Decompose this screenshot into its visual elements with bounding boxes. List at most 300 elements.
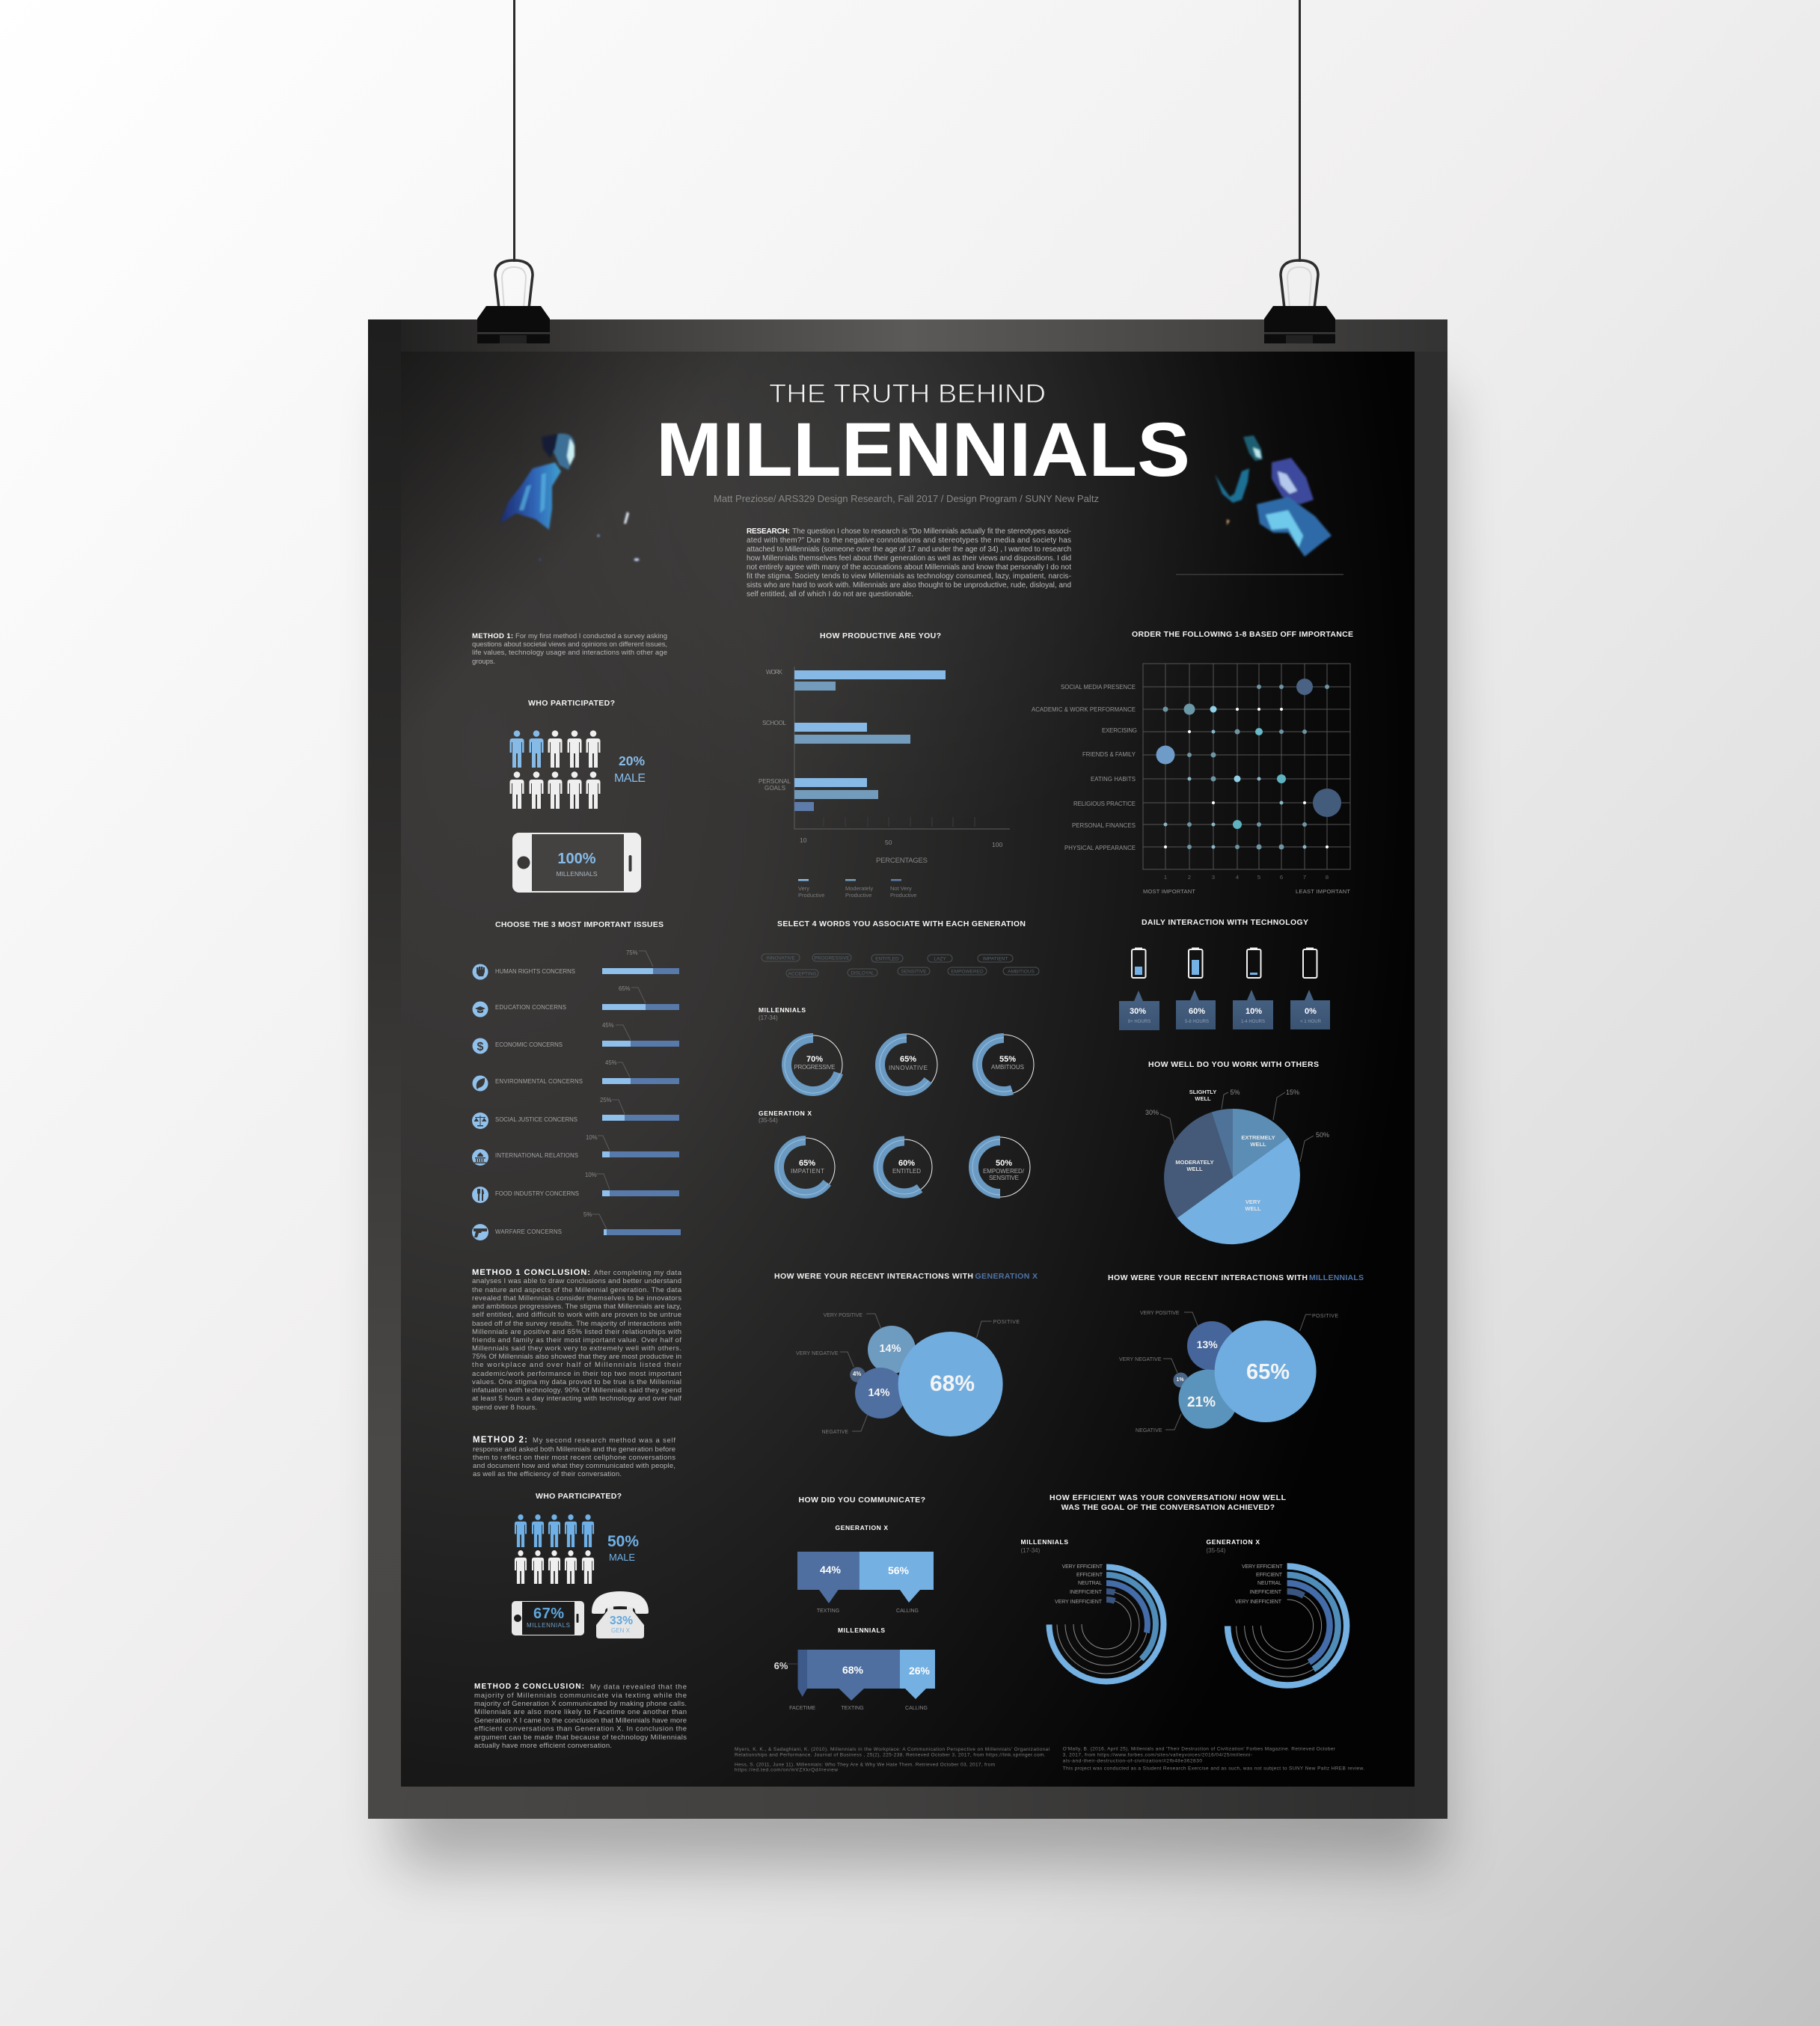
icon: dollar sign: $ bbox=[477, 1041, 484, 1053]
panel: issues bars bbox=[472, 949, 681, 1240]
issue leader lines bbox=[592, 951, 653, 1229]
radial labels: VERY EFFICIENT bbox=[1062, 1564, 1103, 1570]
bubble labels: VERY POSITIVE bbox=[1140, 1311, 1180, 1316]
references left: Hess, S. (2011, June 11). Millennials: Who They Are & Why We Hate Them. Retrieved October 03, 2017, from bbox=[735, 1763, 995, 1767]
slice labels: MODERATELY bbox=[1175, 1159, 1214, 1166]
stat: 20 percent male: MALE bbox=[614, 772, 646, 785]
slice labels: EXTREMELY bbox=[1241, 1134, 1275, 1141]
title bbox=[656, 379, 1190, 492]
bar chart: productivity bbox=[759, 667, 1010, 865]
legend: productivity bbox=[798, 879, 916, 899]
icon: pistol bbox=[474, 1228, 487, 1237]
matrix row labels: FRIENDS & FAMILY bbox=[1082, 751, 1136, 758]
battery stat: 30 percent bbox=[1119, 947, 1159, 1030]
legend: productivity: Productive bbox=[845, 892, 871, 899]
issue percentages: 10% bbox=[585, 1172, 597, 1178]
references left bbox=[735, 1747, 1050, 1773]
bubble: negative 21 percent bbox=[1179, 1369, 1237, 1429]
heading: interactions with generation x: HOW WERE YOUR RECENT INTERACTIONS WITH bbox=[774, 1272, 973, 1281]
donut: 65 percent innovative: INNOVATIVE bbox=[889, 1065, 928, 1071]
legend: productivity: Moderately bbox=[845, 885, 873, 892]
bar chart: productivity: 50 bbox=[885, 839, 892, 846]
pie leader lines bbox=[1160, 1092, 1314, 1162]
label: millennials efficiency bbox=[1020, 1538, 1068, 1554]
heading: three most important issues: CHOOSE THE 3 MOST IMPORTANT ISSUES bbox=[495, 920, 664, 929]
text block: research: self entitled, all of which I do not are questionable. bbox=[747, 590, 913, 599]
heading: select four words: SELECT 4 WORDS YOU ASSOCIATE WITH EACH GENERATION bbox=[777, 919, 1026, 928]
icon: scales bbox=[474, 1115, 486, 1127]
donut: 50 percent empowered sensitive: 50% bbox=[996, 1159, 1012, 1168]
donut: 65 percent impatient bbox=[767, 1128, 845, 1206]
text block: method 1 conclusion bbox=[472, 1268, 682, 1412]
heading: how productive: HOW PRODUCTIVE ARE YOU? bbox=[820, 631, 941, 640]
text block: method 2: METHOD 2: bbox=[473, 1436, 527, 1445]
bubble leader lines bbox=[1163, 1312, 1311, 1430]
slice: very well 50 percent bbox=[1177, 1137, 1300, 1244]
text block: method 1: groups. bbox=[472, 658, 495, 666]
matrix axis labels: 2 bbox=[1188, 874, 1191, 881]
inner panel top glow bbox=[401, 352, 1415, 875]
heading: conversation efficiency: WAS THE GOAL OF THE CONVERSATION ACHIEVED? bbox=[1061, 1503, 1275, 1512]
divider under right photo bbox=[1176, 574, 1343, 575]
radial labels bbox=[1235, 1564, 1283, 1605]
issue labels: ENVIRONMENTAL CONCERNS bbox=[495, 1078, 583, 1085]
slice labels: WELL bbox=[1250, 1141, 1266, 1148]
word pills: DISLOYAL bbox=[851, 971, 874, 976]
label: generation x efficiency bbox=[1206, 1538, 1260, 1554]
pie percentages: 15% bbox=[1286, 1089, 1299, 1096]
word pills: IMPATIENT bbox=[983, 956, 1008, 962]
text block: research: fit the stigma. Society tends to view Millennials as technology consumed, lazy, impatient, narcis- bbox=[747, 572, 1071, 581]
slice labels: WELL bbox=[1195, 1095, 1211, 1102]
issue percentages bbox=[583, 949, 638, 1218]
matrix row labels: ACADEMIC & WORK PERFORMANCE bbox=[1032, 706, 1136, 713]
text block: method 1 conclusion: and ambitious progressives. The stigma that Millennials are lazy, bbox=[472, 1303, 681, 1311]
matrix row labels: EXERCISING bbox=[1102, 727, 1137, 734]
pie percentages: 50% bbox=[1316, 1131, 1329, 1139]
slice labels: VERY bbox=[1245, 1199, 1260, 1205]
poster frame bbox=[368, 319, 1447, 1819]
title main word: MILLENNIALS bbox=[656, 407, 1190, 492]
text block: method 2 conclusion: majority of Millennials communicate via texting while the bbox=[474, 1692, 687, 1700]
heading: work with others: HOW WELL DO YOU WORK WITH OTHERS bbox=[1148, 1060, 1319, 1069]
battery stat: 0 percent bbox=[1290, 947, 1330, 1029]
poster inner panel bbox=[401, 352, 1415, 1787]
references right: 3, 2017, from https://www.forbes.com/sites/valleyvoices/2016/04/25/millenni- bbox=[1063, 1752, 1252, 1758]
slice: moderately well 30 percent bbox=[1164, 1112, 1233, 1218]
text block: research: not entirely agree with many of the accusations about Millennials and know that personally I do not bbox=[747, 563, 1071, 572]
bubble values: 68% bbox=[930, 1371, 975, 1396]
references right: O'Mally, B. (2016, April 25). Millenials and 'Their Destruction of Civilization' Forbes Magazine. Retrieved October bbox=[1063, 1746, 1336, 1752]
icon: phone 100 percent millennials: MILLENNIALS bbox=[557, 870, 598, 878]
icon: phone 100 percent millennials: 100% bbox=[557, 851, 596, 867]
text block: method 1 bbox=[472, 632, 667, 666]
issue percentages: 45% bbox=[602, 1022, 614, 1029]
bubble chart: interactions with millennials bbox=[1119, 1311, 1338, 1433]
donut: 60 percent entitled: 60% bbox=[898, 1159, 915, 1168]
text block: research: ated with them?" Due to the negative connotations and stereotypes the media and society has bbox=[747, 536, 1071, 545]
heading: conversation efficiency: HOW EFFICIENT WAS YOUR CONVERSATION/ HOW WELL bbox=[1050, 1493, 1287, 1502]
radial arcs bbox=[1228, 1567, 1346, 1685]
issue bar fills bbox=[602, 968, 653, 1235]
text block: method 2 bbox=[473, 1436, 675, 1478]
bubble labels: VERY NEGATIVE bbox=[796, 1351, 839, 1356]
bar chart: productivity: PERSONAL bbox=[759, 778, 791, 785]
text block: research bbox=[747, 527, 1071, 599]
issue icons bbox=[472, 964, 488, 1240]
matrix axis ends bbox=[1143, 888, 1350, 895]
text block: method 1 conclusion: self entitled, and difficult to work with are proven to be untrue bbox=[472, 1311, 681, 1319]
split bar: millennials communication: FACETIME bbox=[789, 1706, 815, 1711]
bubble: positive 68 percent bbox=[898, 1332, 1003, 1436]
bubble values: 1% bbox=[1177, 1377, 1184, 1383]
text block: method 1 conclusion: friends and family as their most important value. Over half of bbox=[472, 1336, 681, 1344]
donut: 60 percent entitled bbox=[867, 1130, 942, 1205]
radial labels: EFFICIENT bbox=[1256, 1573, 1283, 1578]
text block: research: RESEARCH: bbox=[747, 527, 790, 536]
heading: order importance: ORDER THE FOLLOWING 1-8 BASED OFF IMPORTANCE bbox=[1132, 630, 1353, 639]
donut: 55 percent ambitious: 55% bbox=[999, 1055, 1016, 1064]
references right: This project was conducted as a Student Research Exercise and as such, was not subject to SUNY New Paltz HREB review. bbox=[1063, 1766, 1364, 1772]
radial labels: VERY INEFFICIENT bbox=[1235, 1600, 1282, 1605]
donut: 70 percent progressive: PROGRESSIVE bbox=[794, 1064, 835, 1071]
icon: phone 100 percent millennials bbox=[512, 833, 641, 893]
icon: telephone 33 percent gen x bbox=[592, 1591, 649, 1638]
pictogram: 50 percent male bbox=[515, 1514, 594, 1584]
word pills: SENSITIVE bbox=[901, 970, 927, 974]
bottom frame band bbox=[368, 1787, 1447, 1819]
text block: method 2 conclusion: Generation X I came to the conclusion that Millennials have more bbox=[474, 1716, 687, 1725]
icon: telephone 33 percent gen x: 33% bbox=[610, 1615, 633, 1627]
donut: 65 percent impatient: IMPATIENT bbox=[791, 1168, 824, 1175]
bubble labels: POSITIVE bbox=[1312, 1314, 1338, 1319]
radial labels: VERY EFFICIENT bbox=[1242, 1564, 1283, 1570]
references right bbox=[1063, 1746, 1364, 1772]
issue labels: WARFARE CONCERNS bbox=[495, 1228, 562, 1235]
word pills: LAZY bbox=[934, 956, 946, 962]
icon: graduation cap bbox=[475, 1006, 485, 1013]
text block: method 1 conclusion: the workplace and over half of Millennials listed their bbox=[472, 1361, 681, 1369]
matrix grid bbox=[1143, 664, 1350, 869]
split bar: generation x communication: CALLING bbox=[896, 1609, 919, 1614]
donut: 65 percent innovative bbox=[869, 1027, 944, 1102]
text block: method 2 conclusion: Millennials are also more likely to Facetime one another than bbox=[474, 1708, 687, 1716]
split bar: millennials communication: 26% bbox=[909, 1665, 931, 1677]
battery stat: 0 percent: 0% bbox=[1305, 1007, 1317, 1016]
icon: phone 67 percent millennials: MILLENNIALS bbox=[527, 1622, 570, 1629]
issue labels: INTERNATIONAL RELATIONS bbox=[495, 1152, 578, 1159]
text block: method 1 conclusion: academic/work performance in their top two most important bbox=[472, 1370, 681, 1378]
heading: conversation efficiency bbox=[1050, 1493, 1287, 1512]
issue percentages: 45% bbox=[605, 1059, 617, 1066]
hanging wire left bbox=[513, 0, 515, 262]
text block: method 2: them to reflect on their most recent cellphone conversations bbox=[473, 1454, 675, 1462]
heading: interactions with millennials: MILLENNIALS bbox=[1309, 1273, 1364, 1282]
references left: Myers, K. K., & Sadaghiani, K. (2010). Millennials in the Workplace: A Communication Perspective on Millennials' Organizational bbox=[735, 1747, 1050, 1752]
bubble chart: interactions with generation x bbox=[796, 1313, 1020, 1436]
matrix axis labels bbox=[1164, 874, 1329, 881]
bubble labels: NEGATIVE bbox=[821, 1430, 848, 1435]
split bar: generation x communication: 44% bbox=[820, 1564, 842, 1576]
split bar: generation x communication: 56% bbox=[888, 1564, 910, 1576]
word pills: EMPOWERED bbox=[951, 970, 984, 974]
text block: method 1 conclusion: at least 5 hours a day interacting with technology and over half bbox=[472, 1395, 681, 1403]
matrix row labels: PERSONAL FINANCES bbox=[1072, 822, 1136, 829]
references right: als-and-their-destruction-of-civilization/#2fb48e362830 bbox=[1063, 1758, 1202, 1764]
legend: productivity: Productive bbox=[890, 892, 916, 899]
radial labels bbox=[1055, 1564, 1103, 1605]
donut: 70 percent progressive: 70% bbox=[806, 1055, 823, 1064]
label: millennials group bbox=[759, 1006, 806, 1021]
stat: 50 percent male: 50% bbox=[607, 1533, 639, 1550]
split bar: millennials communication: 6% bbox=[774, 1660, 788, 1671]
bubble labels bbox=[1119, 1311, 1338, 1433]
bubble: very negative 4 percent bbox=[850, 1367, 865, 1383]
matrix axis labels: 6 bbox=[1280, 874, 1283, 881]
text block: method 1 conclusion: spend over 8 hours. bbox=[472, 1404, 537, 1412]
text block: method 2: My second research method was a self bbox=[533, 1436, 675, 1445]
issue percentages: 65% bbox=[619, 985, 631, 992]
text block: method 2 conclusion: My data revealed that the bbox=[590, 1683, 687, 1691]
matrix axis labels: 8 bbox=[1326, 874, 1329, 881]
battery stat: 60 percent: 5-8 HOURS bbox=[1185, 1020, 1209, 1024]
icon: capitol bbox=[474, 1152, 486, 1163]
radial thin tracks bbox=[1057, 1575, 1156, 1674]
matrix axis ends: MOST IMPORTANT bbox=[1143, 888, 1195, 895]
slice: slightly well 5 percent bbox=[1212, 1109, 1233, 1178]
word pills: ENTITLED bbox=[875, 956, 899, 962]
icon: binder clip right bbox=[1264, 260, 1335, 343]
bubble values: 13% bbox=[1197, 1338, 1218, 1350]
photo: right student silhouettes bbox=[1215, 435, 1332, 557]
radial labels: INEFFICIENT bbox=[1250, 1590, 1282, 1595]
issue percentages: 5% bbox=[583, 1211, 592, 1218]
text block: method 1: questions about societal views and opinions on different issues, bbox=[472, 640, 667, 649]
heading: who participated 2: WHO PARTICIPATED? bbox=[536, 1492, 622, 1501]
battery stat: 0 percent: < 1 HOUR bbox=[1300, 1020, 1322, 1024]
label: millennials group: MILLENNIALS bbox=[759, 1006, 806, 1014]
radial chart: generation x efficiency bbox=[1228, 1564, 1346, 1685]
label: millennials communication: MILLENNIALS bbox=[838, 1626, 885, 1634]
matrix row labels: SOCIAL MEDIA PRESENCE bbox=[1061, 684, 1136, 691]
photo: left student silhouette bbox=[500, 434, 639, 561]
heading: daily interaction: DAILY INTERACTION WITH TECHNOLOGY bbox=[1142, 918, 1308, 927]
text block: research: attached to Millennials (someone over the age of 17 and under the age of 34) , I wanted to research bbox=[747, 545, 1071, 554]
bubble values: 4% bbox=[853, 1371, 861, 1377]
radial arcs bbox=[1049, 1567, 1164, 1682]
text block: method 2 conclusion: majority of Generation X communicated by making phone calls. bbox=[474, 1700, 687, 1708]
label: millennials efficiency: MILLENNIALS bbox=[1020, 1538, 1068, 1546]
subtitle: Matt Preziose/ ARS329 Design Research, Fall 2017 / Design Program / SUNY New Paltz bbox=[714, 494, 1099, 504]
battery stat: 30 percent: 8+ HOURS bbox=[1128, 1020, 1150, 1024]
slice labels bbox=[1175, 1089, 1275, 1212]
bubble values: 14% bbox=[868, 1387, 890, 1399]
heading: who participated 1: WHO PARTICIPATED? bbox=[528, 699, 615, 708]
issue labels bbox=[495, 968, 583, 1235]
matrix row labels: PHYSICAL APPEARANCE bbox=[1064, 845, 1136, 851]
label: millennials group: (17-34) bbox=[759, 1014, 778, 1021]
text block: method 2 conclusion: actually have more efficient conversation. bbox=[474, 1742, 612, 1750]
icon: phone 67 percent millennials: 67% bbox=[533, 1606, 564, 1622]
text block: method 1 conclusion: based off of the survey results. The majority of interactions with bbox=[472, 1320, 681, 1328]
stat: 20 percent male bbox=[614, 753, 646, 785]
matrix axis labels: 7 bbox=[1303, 874, 1306, 881]
issue percentages: 25% bbox=[600, 1097, 612, 1104]
left frame band bbox=[368, 319, 401, 1819]
battery stat: 60 percent bbox=[1176, 947, 1216, 1029]
radial labels: NEUTRAL bbox=[1257, 1581, 1281, 1586]
radial thin tracks bbox=[1237, 1575, 1338, 1677]
bar chart: productivity: WORK bbox=[766, 669, 783, 676]
matrix axis labels: 1 bbox=[1164, 874, 1167, 881]
bubble labels: POSITIVE bbox=[993, 1320, 1020, 1325]
donut: 55 percent ambitious bbox=[970, 1031, 1038, 1098]
dot matrix chart: importance bbox=[1032, 664, 1350, 895]
bar chart: productivity: SCHOOL bbox=[762, 720, 787, 726]
heading: interactions with millennials: HOW WERE YOUR RECENT INTERACTIONS WITH bbox=[1108, 1273, 1308, 1282]
pie percentages bbox=[1145, 1089, 1329, 1139]
slice labels: WELL bbox=[1186, 1166, 1203, 1172]
donut: 65 percent impatient: 65% bbox=[799, 1159, 815, 1168]
bubble values: 21% bbox=[1187, 1395, 1216, 1410]
radial labels: INEFFICIENT bbox=[1070, 1590, 1103, 1595]
matrix axis labels: 4 bbox=[1236, 874, 1239, 881]
inner panel corner shade bbox=[401, 352, 1415, 1787]
issue percentages: 10% bbox=[586, 1134, 598, 1141]
text block: method 1 conclusion: After completing my data bbox=[594, 1269, 682, 1277]
references left: https://ed.ted.com/on/mVZXkrQd#review bbox=[735, 1767, 838, 1773]
label: millennials efficiency: (17-34) bbox=[1020, 1547, 1041, 1554]
poster shadow bbox=[396, 389, 1444, 1867]
text block: method 1 conclusion: values. One stigma my data proved to be true is the Millennial bbox=[472, 1378, 681, 1386]
matrix row labels: RELIGIOUS PRACTICE bbox=[1073, 801, 1136, 807]
bubble labels: VERY NEGATIVE bbox=[1119, 1357, 1162, 1362]
donut: 50 percent empowered sensitive: SENSITIVE bbox=[989, 1175, 1019, 1181]
stat: 50 percent male: MALE bbox=[609, 1552, 635, 1563]
split bar: generation x communication: TEXTING bbox=[817, 1609, 839, 1614]
stat: 20 percent male: 20% bbox=[619, 753, 645, 768]
matrix row labels bbox=[1032, 684, 1137, 851]
matrix axis labels: 5 bbox=[1257, 874, 1260, 881]
matrix row labels: EATING HABITS bbox=[1091, 776, 1136, 783]
hanging wire right bbox=[1299, 0, 1301, 262]
text block: method 1: life values, technology usage and interactions with other age bbox=[472, 649, 667, 657]
text block: method 2 conclusion: METHOD 2 CONCLUSION: bbox=[474, 1683, 584, 1691]
issue labels: EDUCATION CONCERNS bbox=[495, 1004, 566, 1011]
word pills: AMBITIOUS bbox=[1008, 970, 1035, 974]
radial labels: VERY INEFFICIENT bbox=[1055, 1600, 1103, 1605]
issue bar tracks bbox=[602, 968, 681, 1235]
icon: fork and knife bbox=[477, 1189, 484, 1201]
bubble values: 14% bbox=[879, 1343, 901, 1355]
heading: how did you communicate: HOW DID YOU COMMUNICATE? bbox=[799, 1496, 925, 1505]
text block: method 1 conclusion: METHOD 1 CONCLUSION: bbox=[472, 1268, 590, 1277]
heading: interactions with generation x: GENERATION X bbox=[975, 1272, 1038, 1281]
bubble values: 65% bbox=[1246, 1360, 1290, 1384]
split bar: millennials communication: TEXTING bbox=[841, 1706, 864, 1711]
right frame band bbox=[1415, 352, 1447, 1819]
bubble: negative 14 percent bbox=[855, 1368, 906, 1418]
legend: productivity: Very bbox=[798, 885, 809, 892]
bubble labels: NEGATIVE bbox=[1136, 1428, 1162, 1433]
text block: research: sists who are hard to work with. Millennials are also thought to be unproductive, rude, disloyal, and bbox=[747, 581, 1071, 590]
matrix axis labels: 3 bbox=[1212, 874, 1215, 881]
donut: 60 percent entitled: ENTITLED bbox=[892, 1168, 921, 1175]
bubble values bbox=[1177, 1338, 1290, 1410]
text block: method 2: response and asked both Millennials and the generation before bbox=[473, 1445, 675, 1454]
issue labels: SOCIAL JUSTICE CONCERNS bbox=[495, 1116, 577, 1123]
split bar: millennials communication: CALLING bbox=[905, 1706, 928, 1711]
donut: 65 percent innovative: 65% bbox=[900, 1055, 916, 1064]
battery stat: 30 percent: 30% bbox=[1130, 1007, 1146, 1016]
icon: phone 67 percent millennials bbox=[512, 1601, 584, 1635]
text block: method 2 conclusion: efficient conversations than Generation X. In conclusion the bbox=[474, 1725, 687, 1733]
label: generation x group: GENERATION X bbox=[759, 1110, 812, 1117]
donut: 50 percent empowered sensitive bbox=[970, 1137, 1030, 1197]
text block: method 2: and document how and what they communicated with people, bbox=[473, 1462, 675, 1470]
donut: 50 percent empowered sensitive: EMPOWERED/ bbox=[983, 1168, 1025, 1175]
issue percentages: 75% bbox=[626, 949, 638, 956]
donut: 55 percent ambitious: AMBITIOUS bbox=[991, 1064, 1024, 1071]
battery stat: 10 percent: 10% bbox=[1245, 1007, 1262, 1016]
matrix axis ends: LEAST IMPORTANT bbox=[1296, 888, 1350, 895]
text block: research: The question I chose to research is "Do Millennials actually fit the stereotypes associ- bbox=[792, 527, 1071, 536]
issue labels: ECONOMIC CONCERNS bbox=[495, 1041, 563, 1048]
battery stat: 60 percent: 60% bbox=[1189, 1007, 1205, 1016]
icon: leaf bbox=[477, 1078, 485, 1089]
donut: 70 percent progressive bbox=[777, 1029, 849, 1101]
poster bbox=[368, 319, 1447, 1819]
bubble: very positive 13 percent bbox=[1187, 1321, 1237, 1371]
bar chart: productivity: 10 bbox=[800, 836, 807, 844]
pie percentages: 5% bbox=[1230, 1089, 1240, 1096]
matrix dots bbox=[1156, 679, 1341, 850]
label: generation x group bbox=[759, 1110, 812, 1124]
bubble labels: VERY POSITIVE bbox=[824, 1313, 862, 1318]
label: generation x efficiency: GENERATION X bbox=[1206, 1538, 1260, 1546]
legend: productivity: Productive bbox=[798, 892, 824, 899]
text block: method 1 conclusion: revealed that Millennials consider themselves to be innovators bbox=[472, 1294, 681, 1303]
bubble: very negative 1 percent bbox=[1173, 1372, 1188, 1387]
pictogram: 20 percent male bbox=[510, 730, 600, 809]
text block: method 1 conclusion: analyses I was able to draw conclusions and better understand bbox=[472, 1277, 681, 1285]
bubble: very positive 14 percent bbox=[868, 1326, 916, 1374]
text block: method 1 conclusion: Millennials are positive and 65% listed their relationships with bbox=[472, 1328, 681, 1336]
legend: productivity: Not Very bbox=[890, 885, 912, 892]
issue labels: FOOD INDUSTRY CONCERNS bbox=[495, 1190, 579, 1197]
icon: fist bbox=[477, 967, 485, 976]
word pills: ACCEPTING bbox=[788, 971, 816, 977]
pie chart: teamwork bbox=[1145, 1089, 1329, 1244]
bar chart: productivity: GOALS bbox=[765, 785, 785, 792]
label: generation x efficiency: (35-54) bbox=[1206, 1547, 1226, 1554]
text block: method 2 conclusion bbox=[474, 1683, 687, 1750]
radial chart: millennials efficiency bbox=[1049, 1564, 1164, 1682]
bubble values bbox=[853, 1343, 975, 1399]
word pills: INNOVATIVE bbox=[766, 956, 795, 961]
pie percentages: 30% bbox=[1145, 1109, 1159, 1116]
split bar: millennials communication: 68% bbox=[842, 1664, 864, 1676]
bubble leader lines bbox=[840, 1314, 992, 1431]
text block: method 1 conclusion: Millennials said they work very to extremely well with others. bbox=[472, 1344, 681, 1353]
label: generation x group: (35-54) bbox=[759, 1117, 778, 1124]
stat: 50 percent male bbox=[607, 1533, 639, 1563]
icon: telephone 33 percent gen x: GEN X bbox=[611, 1627, 631, 1634]
references left: Relationships and Performance. Journal of Business , 25(2), 225-238. Retrieved October 3, 2017, from https://link.springer.com. bbox=[735, 1752, 1046, 1758]
text block: method 1 conclusion: 75% Of Millennials also showed that they are most productive in bbox=[472, 1353, 681, 1361]
radial labels: EFFICIENT bbox=[1076, 1573, 1103, 1578]
word pills bbox=[762, 954, 1039, 977]
